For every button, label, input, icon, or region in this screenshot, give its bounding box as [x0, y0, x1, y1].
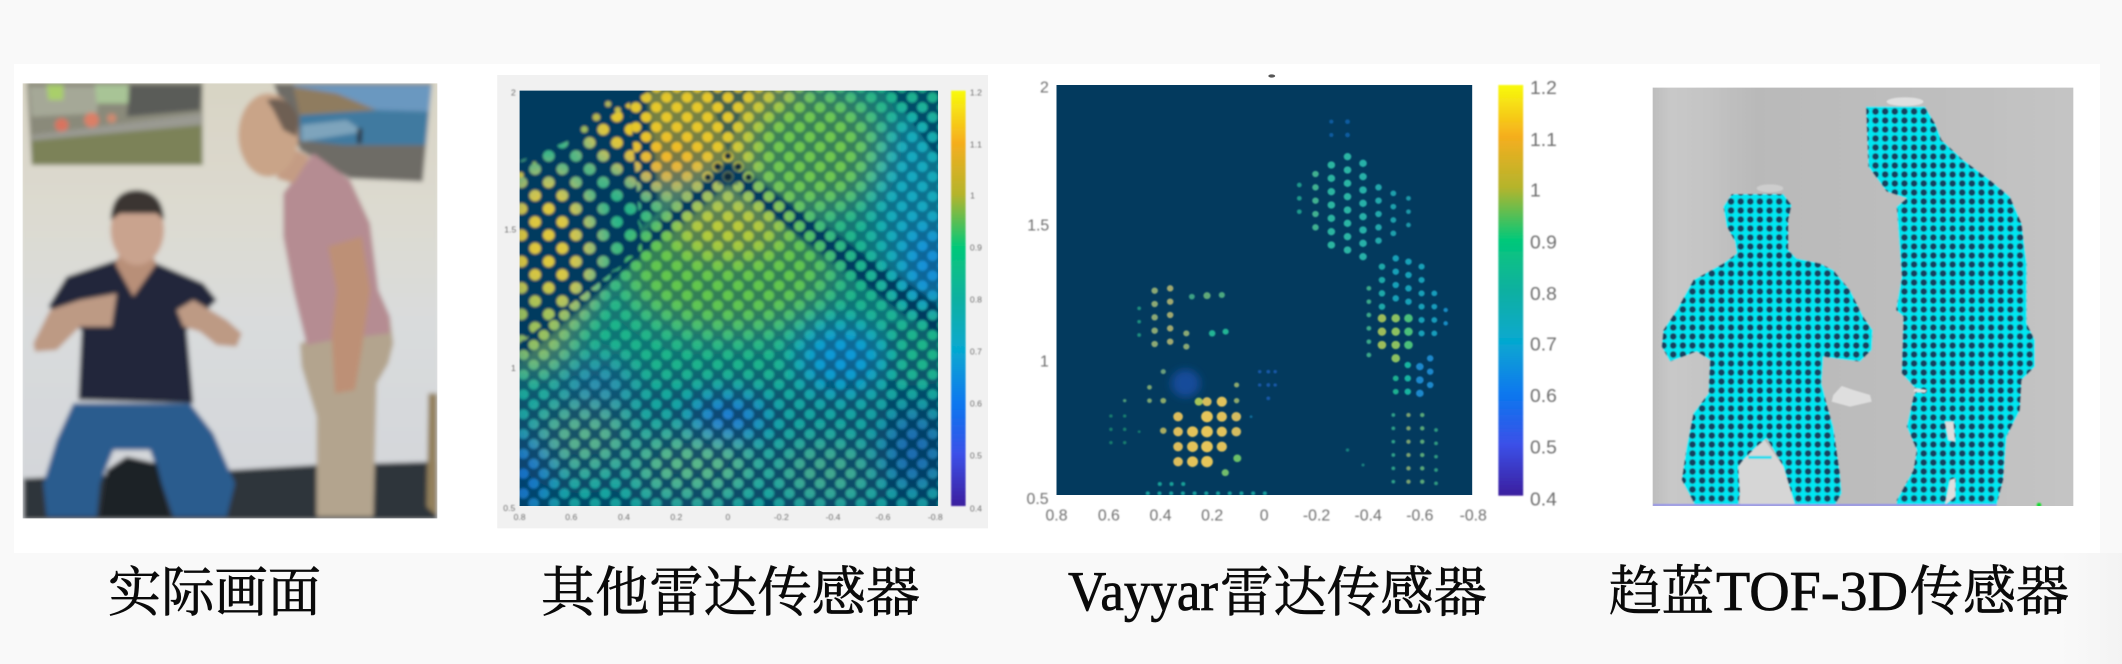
colour bar: [1498, 85, 1523, 496]
label: TOF-3D sensor: TOF-3D: [1716, 561, 1908, 623]
panel: TOF-3D depth image: [1650, 85, 2077, 508]
axis tick labels: -0.8: [1460, 508, 1487, 524]
panel: other radar sensor heatmap: [497, 67, 988, 528]
panel: Vayyar radar sensor heatmap: [1027, 74, 1557, 524]
axis tick labels: 0.8: [1045, 508, 1067, 524]
axis tick labels: 0.5: [970, 451, 982, 461]
axis tick labels: 2: [511, 87, 516, 97]
axis tick labels: 1: [1040, 354, 1049, 371]
label: Vayyar radar sensor: 雷达传感器: [1220, 563, 1487, 623]
panel: Vayyar radar sensor heatmap: 1.1: [1530, 130, 1557, 151]
panel: Vayyar radar sensor heatmap: 0.5: [1530, 438, 1557, 458]
axis tick labels: 1.5: [1027, 218, 1050, 235]
axis tick labels: 0.4: [970, 503, 982, 513]
axis tick labels: 1: [511, 363, 516, 373]
axis tick labels: -0.2: [774, 512, 789, 522]
dense dot heatmap: [520, 90, 938, 506]
axis tick labels: 0.9: [970, 243, 982, 253]
axis tick labels: -0.6: [1406, 508, 1433, 524]
title mark: [1268, 74, 1275, 78]
axis tick labels: 0.8: [970, 295, 982, 305]
axis tick labels: 1.1: [970, 139, 982, 149]
axis tick labels: -0.8: [928, 512, 943, 522]
axis tick labels: 0.2: [1201, 508, 1223, 524]
panel: Vayyar radar sensor heatmap: 0.4: [1530, 490, 1557, 510]
label: TOF-3D sensor: 传感器: [1910, 562, 2069, 622]
axis tick labels: 0: [1260, 508, 1269, 524]
axis tick labels: [1027, 80, 1487, 524]
axis tick labels: 0.2: [670, 512, 683, 522]
axis tick labels: 0: [726, 512, 731, 522]
axis tick labels: 0.8: [514, 512, 526, 522]
axis tick labels: -0.2: [1303, 508, 1330, 524]
axis tick labels: -0.4: [826, 512, 841, 522]
label: other radar sensor: 其他雷达传感器: [541, 563, 920, 623]
white panel: [14, 64, 2100, 553]
infographic: sensor comparison: [22, 74, 2074, 622]
axis tick labels: 0.7: [970, 347, 982, 357]
label: TOF-3D sensor: [1609, 561, 2069, 623]
panel: Vayyar radar sensor heatmap: 1.2: [1530, 78, 1557, 99]
axis tick labels: -0.4: [1355, 508, 1382, 524]
panel: Vayyar radar sensor heatmap: 0.6: [1530, 386, 1557, 407]
panel: actual scene photo: [20, 80, 440, 522]
axis tick labels: 0.6: [565, 512, 578, 522]
axis tick labels: 2: [1040, 80, 1049, 96]
point cloud: two people: [1111, 122, 1446, 497]
axis tick labels: 0.6: [1098, 508, 1120, 524]
axis tick labels: 1.2: [970, 87, 982, 97]
silhouette: standing person: [1866, 107, 2035, 505]
panel: Vayyar radar sensor heatmap: 0.8: [1530, 284, 1557, 305]
label: TOF-3D sensor: 趋蓝: [1609, 562, 1714, 622]
plot background: [1056, 85, 1472, 495]
label: Vayyar radar sensor: [1068, 561, 1487, 623]
axis tick labels: 0.5: [503, 503, 516, 513]
axis tick labels: 0.5: [1027, 491, 1049, 508]
page edge shading: [2060, 553, 2122, 664]
axis tick labels: 0.4: [1149, 508, 1172, 524]
silhouette: seated person: [1662, 194, 1873, 505]
colour bar: [951, 91, 966, 506]
axis tick labels: 0.6: [970, 399, 982, 409]
axis tick labels: 1.5: [504, 225, 517, 235]
panel: Vayyar radar sensor heatmap: 0.7: [1530, 335, 1557, 356]
label: Vayyar radar sensor: Vayyar: [1068, 561, 1218, 623]
panel: Vayyar radar sensor heatmap: 0.9: [1530, 233, 1557, 254]
axis tick labels: 1: [970, 191, 975, 201]
axis tick labels: -0.6: [876, 512, 891, 522]
panel: Vayyar radar sensor heatmap: 1: [1530, 181, 1541, 202]
axis tick labels: [503, 87, 982, 522]
axis tick labels: 0.4: [618, 512, 630, 522]
plot frame: [497, 75, 988, 528]
label: actual scene: 实际画面: [108, 563, 321, 623]
